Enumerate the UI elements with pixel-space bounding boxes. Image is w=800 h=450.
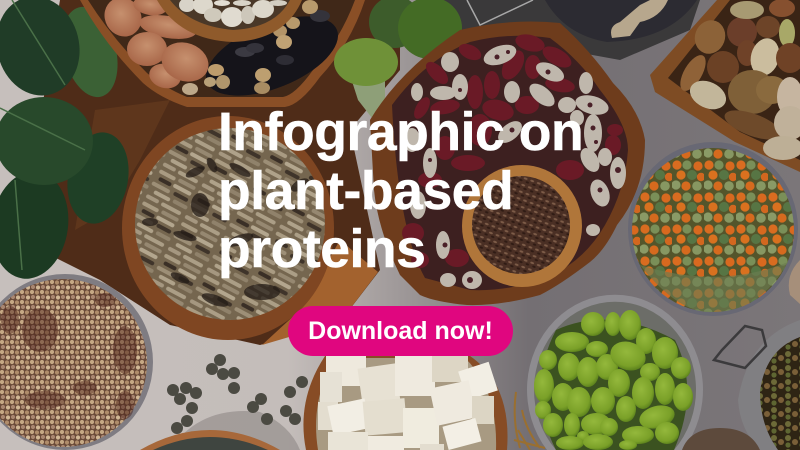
woven basket strands — [514, 392, 545, 450]
bean speckles — [416, 50, 621, 283]
flax seed small bowl — [462, 165, 582, 287]
lentil glass bowl — [628, 142, 798, 316]
brown bulb and nut at right edge — [682, 260, 800, 450]
button: download now — [288, 306, 513, 356]
glass jar of mung beans — [714, 320, 800, 450]
bottom lentil bowl — [140, 430, 280, 450]
shadow over table at bottom — [170, 411, 300, 450]
title: plant-based — [218, 162, 513, 220]
tofu bowl — [303, 356, 508, 450]
title — [218, 103, 583, 279]
broccoli — [334, 0, 462, 118]
speckled white beans — [404, 41, 626, 289]
edamame glass bowl — [527, 295, 703, 450]
dark glass bowl at top — [545, 0, 697, 42]
button: download now: Download now! — [308, 317, 493, 345]
wooden board — [20, 0, 400, 345]
title: Infographic on — [218, 103, 583, 162]
title: proteins — [218, 220, 425, 279]
fava beans — [97, 0, 149, 43]
small bowl of white beans — [157, 0, 302, 42]
red kidney beans — [402, 31, 623, 268]
spinach leaves — [0, 0, 136, 284]
shadow area under top jar — [440, 0, 700, 60]
scattered lentils — [167, 354, 308, 434]
top-left wooden bowl with beans — [80, 0, 365, 112]
dark beans — [195, 0, 349, 112]
wild rice bowl — [122, 116, 334, 340]
nuts tray — [650, 0, 800, 172]
metal clasp near broccoli — [467, 0, 533, 25]
wooden bean bowl — [370, 22, 645, 305]
tan beans — [302, 0, 318, 14]
quinoa glass bowl — [0, 274, 153, 450]
